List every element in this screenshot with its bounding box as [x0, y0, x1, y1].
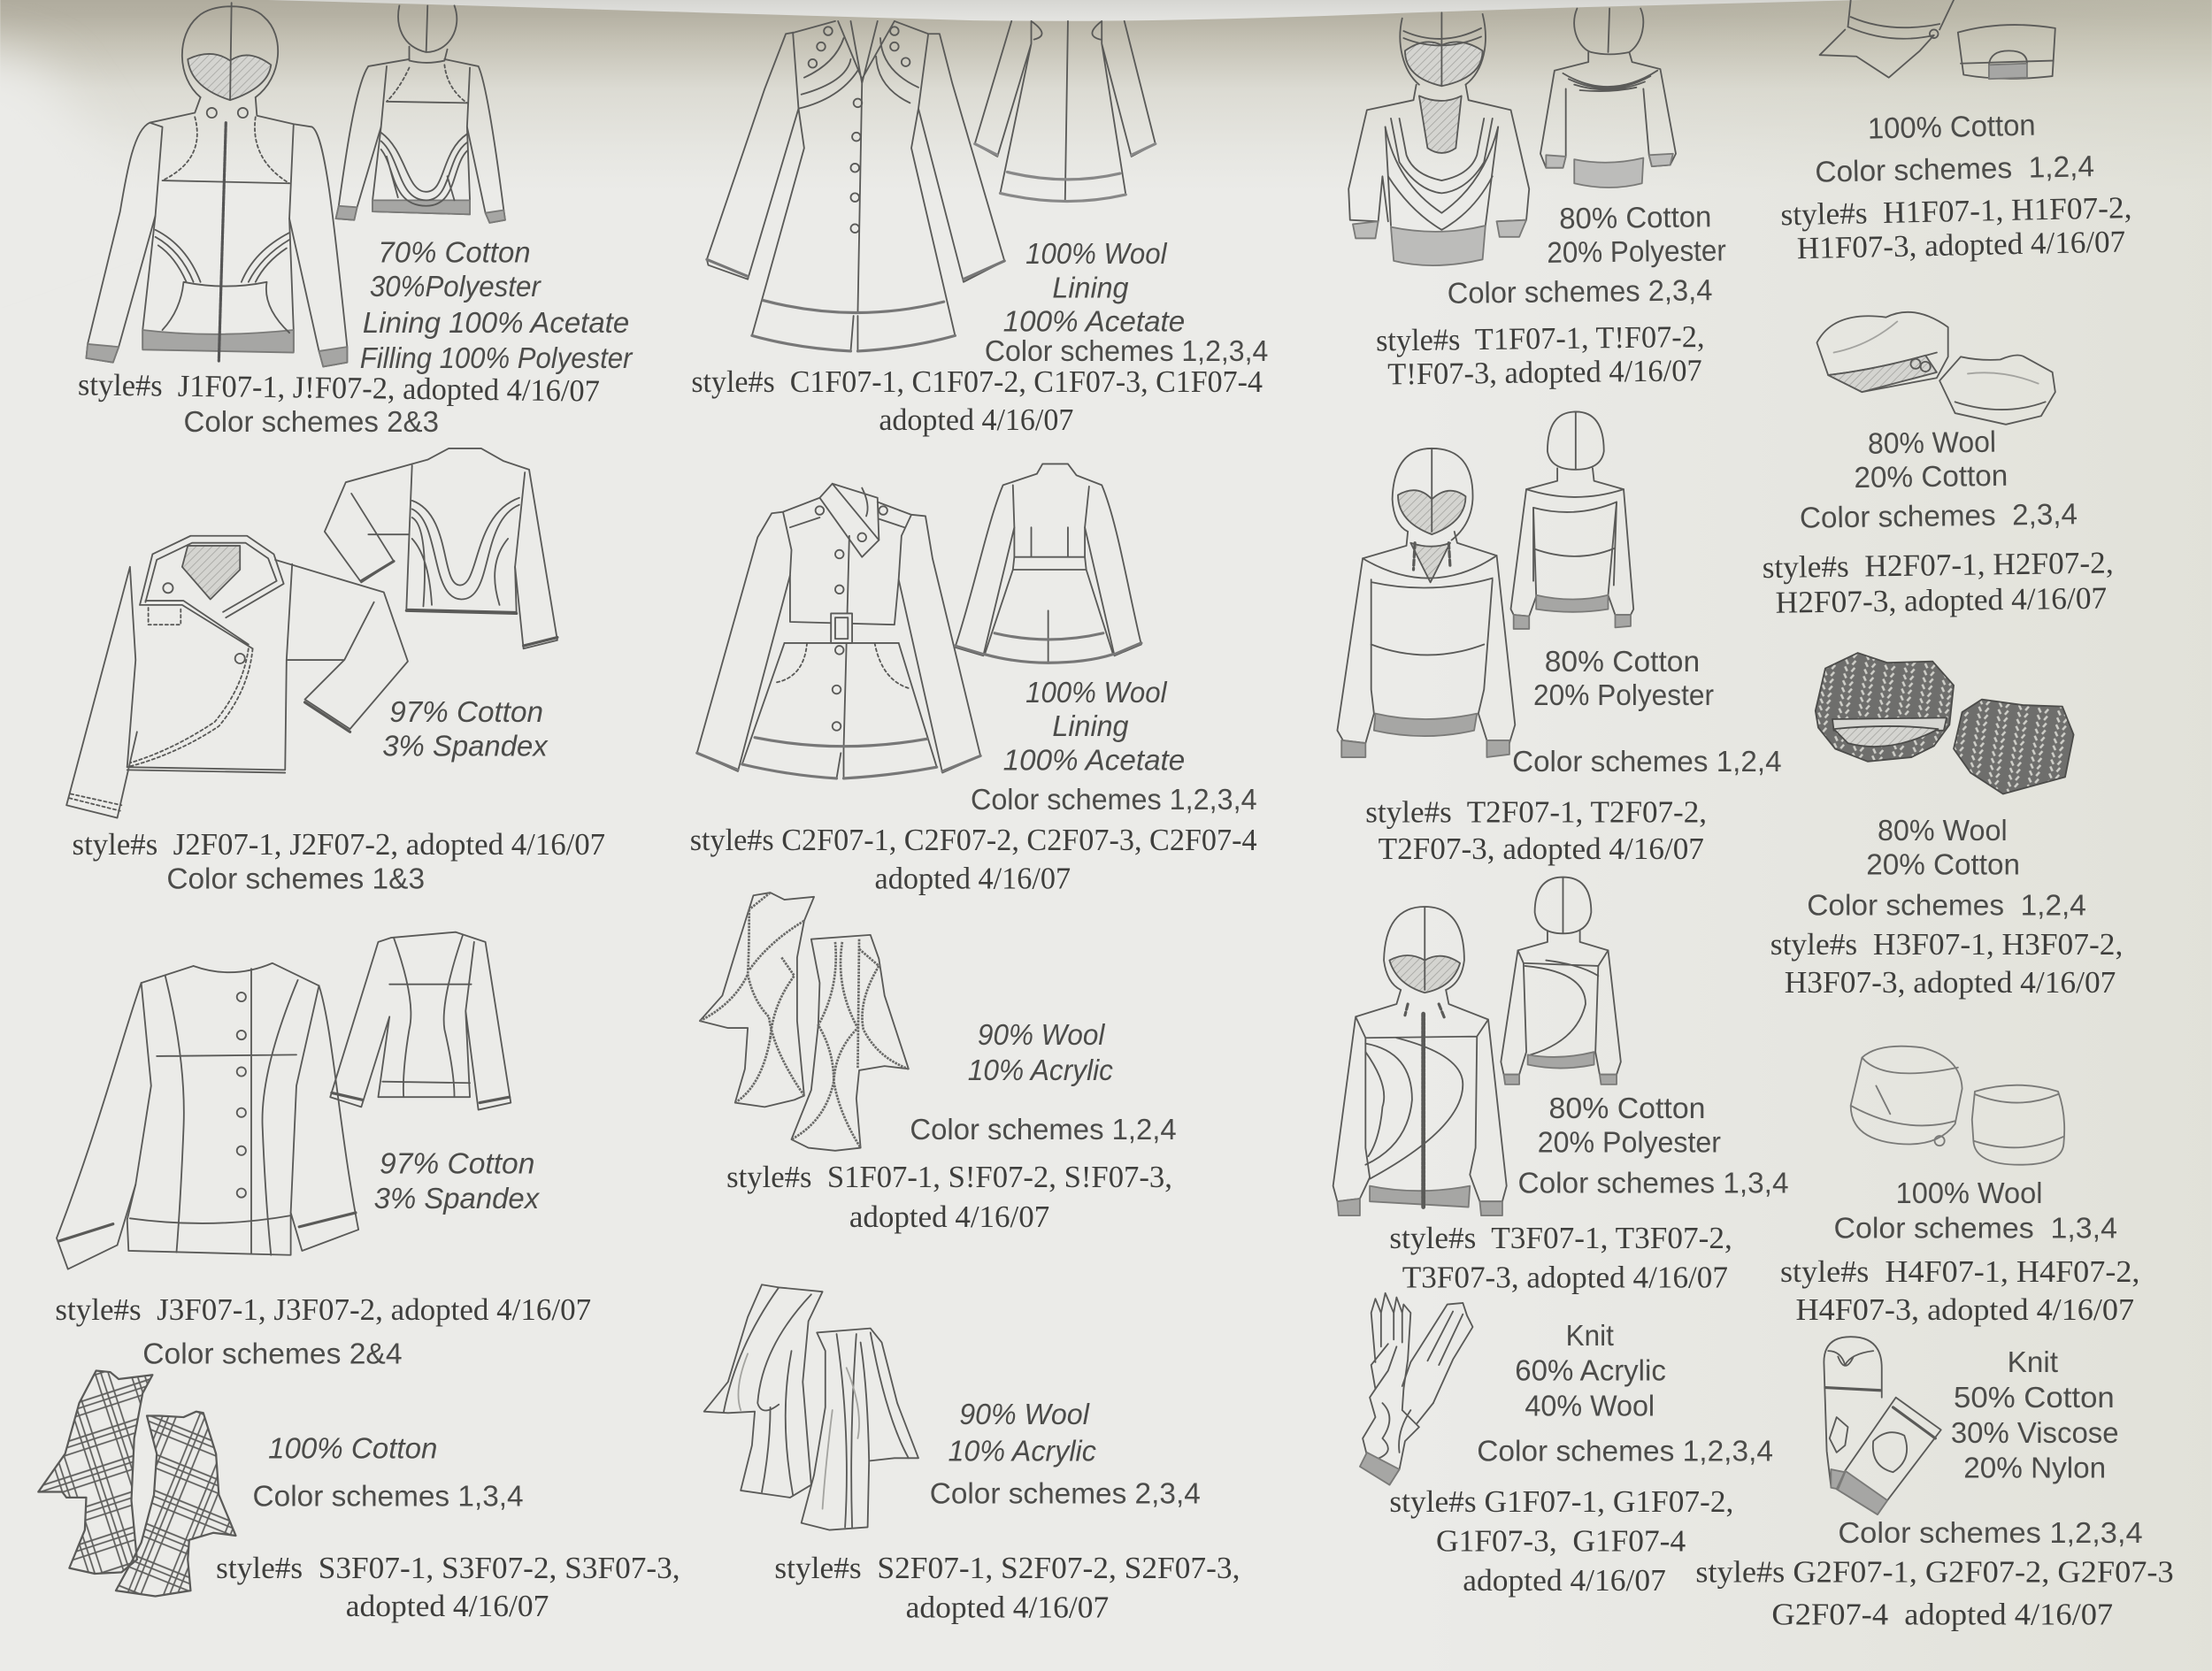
text: C2 fabric and style: 100% Wool — [1025, 677, 1168, 709]
icon: G1 ruched gloves — [1360, 1293, 1472, 1485]
text: G2 fabric and style: Color schemes 1,2,3,4 — [1838, 1517, 2143, 1550]
panel: C1 coat — [691, 21, 1268, 437]
panel: H2 caps — [1761, 312, 2114, 620]
text: S1 fabric and style — [726, 1019, 1177, 1234]
text: G1 fabric and style: Knit — [1566, 1320, 1615, 1353]
panel: J1 jacket — [78, 3, 634, 439]
icon: H2 newsboy caps — [1816, 312, 2055, 425]
text: T1 fabric and style: T!F07-3, adopted 4/16/07 — [1387, 353, 1702, 392]
icon: C2 belted coat front — [697, 484, 980, 778]
text: C2 fabric and style: 100% Acetate — [1003, 744, 1185, 777]
text: G1 fabric and style: style#s G1F07-1, G1F07-2, — [1389, 1484, 1733, 1519]
icon: C1 coat front — [707, 21, 1004, 351]
text: S1 fabric and style: Color schemes 1,2,4 — [910, 1114, 1177, 1146]
icon: T1 hoodie back — [1540, 9, 1676, 188]
text: J1 fabric and style: Filling 100% Polyester — [360, 342, 634, 375]
text: S1 fabric and style: style#s S1F07-1, S!F07-2, S!F07-3, — [726, 1160, 1172, 1194]
text: T2 fabric and style: Color schemes 1,2,4 — [1512, 746, 1782, 778]
text: T2 fabric and style: T2F07-3, adopted 4/16/07 — [1379, 832, 1704, 866]
text: S3 fabric and style: 100% Cotton — [268, 1432, 437, 1465]
panel: C2 coat — [690, 464, 1257, 895]
text: J2 fabric and style: style#s J2F07-1, J2F07-2, adopted 4/16/07 — [73, 827, 605, 862]
text: J1 fabric and style: 30%Polyester — [370, 271, 542, 303]
text: J3 fabric and style: 97% Cotton — [380, 1147, 534, 1180]
text: T3 fabric and style: 80% Cotton — [1549, 1092, 1705, 1125]
icon: G2 patterned mittens — [1824, 1337, 1941, 1514]
icon: J3 button jacket front — [57, 963, 358, 1269]
text: S3 fabric and style: Color schemes 1,3,4 — [253, 1480, 524, 1513]
text: H3 fabric and style: Color schemes 1,2,4 — [1807, 890, 2086, 923]
text: S2 fabric and style: 10% Acrylic — [948, 1435, 1096, 1468]
text: T2 fabric and style: style#s T2F07-1, T2F07-2, — [1365, 794, 1707, 829]
panel: H3 knit caps — [1770, 653, 2123, 1000]
text: T3 fabric and style — [1389, 1092, 1789, 1294]
panel: T3 hoodie — [1333, 878, 1789, 1294]
text: J1 fabric and style — [78, 237, 634, 439]
text: G1 fabric and style: 40% Wool — [1525, 1390, 1655, 1422]
text: G2 fabric and style — [1695, 1346, 2174, 1631]
text: J1 fabric and style: 70% Cotton — [378, 237, 531, 270]
text: C1 fabric and style: adopted 4/16/07 — [879, 402, 1073, 437]
text: T3 fabric and style: Color schemes 1,3,4 — [1517, 1168, 1789, 1200]
text: H3 fabric and style: 80% Wool — [1878, 815, 2008, 847]
text: H4 fabric and style: 100% Wool — [1896, 1177, 2042, 1210]
panel: G1 gloves — [1360, 1293, 1773, 1598]
panel: S2 scarf — [704, 1284, 1240, 1624]
text: G1 fabric and style: 60% Acrylic — [1515, 1355, 1666, 1388]
panel: H1 caps — [1778, 0, 2133, 266]
text: C2 fabric and style: style#s C2F07-1, C2F07-2, C2F07-3, C2F07-4 — [690, 823, 1257, 857]
text: C2 fabric and style: adopted 4/16/07 — [875, 861, 1071, 895]
text: S3 fabric and style: style#s S3F07-1, S3F07-2, S3F07-3, — [216, 1551, 680, 1585]
text: T1 fabric and style — [1374, 201, 1728, 392]
text: H3 fabric and style: 20% Cotton — [1866, 848, 2020, 881]
icon: T1 hoodie front — [1348, 12, 1529, 265]
icon: T3 hoodie back — [1501, 878, 1621, 1085]
text: C2 fabric and style: Color schemes 1,2,3,4 — [971, 784, 1257, 816]
text: J1 fabric and style: style#s J1F07-1, J!F07-2, adopted 4/16/07 — [78, 367, 600, 409]
text: S1 fabric and style: adopted 4/16/07 — [849, 1200, 1049, 1234]
text: T1 fabric and style: 20% Polyester — [1547, 234, 1726, 270]
text: S1 fabric and style: 90% Wool — [978, 1019, 1106, 1052]
text: S3 fabric and style: adopted 4/16/07 — [346, 1589, 549, 1623]
text: S2 fabric and style — [774, 1399, 1240, 1624]
text: G1 fabric and style — [1389, 1320, 1773, 1598]
icon: S1 scarf with diamond seams — [700, 893, 909, 1151]
text: T2 fabric and style: 20% Polyester — [1533, 679, 1714, 712]
text: H2 fabric and style: 80% Wool — [1868, 426, 1996, 461]
text: J1 fabric and style: Color schemes 2&3 — [183, 406, 439, 439]
text: T1 fabric and style: 80% Cotton — [1559, 201, 1712, 235]
text: J2 fabric and style: Color schemes 1&3 — [166, 862, 425, 895]
text: J3 fabric and style: Color schemes 2&4 — [142, 1338, 403, 1370]
text: H3 fabric and style — [1770, 815, 2123, 1000]
text: H4 fabric and style: Color schemes 1,3,4 — [1834, 1213, 2117, 1246]
text: J3 fabric and style: 3% Spandex — [374, 1183, 540, 1215]
text: H1 fabric and style: H1F07-3, adopted 4/16/07 — [1796, 224, 2126, 265]
icon: C2 coat back — [955, 464, 1141, 663]
text: T3 fabric and style: 20% Polyester — [1538, 1126, 1721, 1159]
text: C1 fabric and style: Lining — [1052, 272, 1129, 304]
text: T3 fabric and style: T3F07-3, adopted 4/16/07 — [1402, 1260, 1728, 1294]
icon: C1 coat back — [975, 21, 1156, 202]
text: H2 fabric and style: H2F07-3, adopted 4/16/07 — [1775, 580, 2107, 620]
panel: J3 jacket — [55, 932, 591, 1370]
text: C1 fabric and style — [691, 238, 1268, 437]
text: C2 fabric and style — [690, 677, 1257, 895]
text: H4 fabric and style: H4F07-3, adopted 4/16/07 — [1796, 1292, 2134, 1327]
text: T1 fabric and style: style#s T1F07-1, T!F07-2, — [1376, 319, 1705, 357]
text: C1 fabric and style: 100% Wool — [1025, 238, 1168, 271]
text: C1 fabric and style: style#s C1F07-1, C1F07-2, C1F07-3, C1F07-4 — [691, 364, 1263, 399]
text: J2 fabric and style: 97% Cotton — [389, 696, 543, 729]
text: T1 fabric and style: Color schemes 2,3,4 — [1448, 274, 1713, 310]
text: G1 fabric and style: Color schemes 1,2,3,4 — [1477, 1435, 1773, 1468]
text: G2 fabric and style: 50% Cotton — [1954, 1382, 2115, 1414]
icon: H3 cable knit caps — [1816, 653, 2074, 793]
panel: G2 mittens — [1695, 1337, 2174, 1631]
text: G2 fabric and style: style#s G2F07-1, G2F07-2, G2F07-3 — [1695, 1555, 2174, 1590]
icon: T2 hoodie front — [1337, 448, 1515, 757]
text: H1 fabric and style: Color schemes 1,2,4 — [1815, 150, 2094, 189]
text: S1 fabric and style: 10% Acrylic — [968, 1054, 1113, 1087]
text: J1 fabric and style: Lining 100% Acetate — [363, 307, 629, 340]
text: T3 fabric and style: style#s T3F07-1, T3F07-2, — [1389, 1221, 1732, 1255]
text: G2 fabric and style: 20% Nylon — [1963, 1453, 2106, 1485]
text: T2 fabric and style — [1365, 646, 1782, 866]
text: J2 fabric and style — [73, 696, 605, 895]
text: G2 fabric and style: G2F07-4 adopted 4/16/07 — [1771, 1597, 2113, 1631]
text: S2 fabric and style: adopted 4/16/07 — [906, 1590, 1109, 1624]
icon: J1 jacket back — [336, 5, 505, 223]
icon: J1 hooded jacket front — [86, 3, 347, 366]
icon: H1 visor cap — [1820, 0, 1954, 78]
panel: T1 hoodie — [1348, 9, 1728, 392]
text: G1 fabric and style: G1F07-3, G1F07-4 — [1436, 1524, 1686, 1559]
icon: T3 zip hoodie front — [1333, 907, 1507, 1215]
icon: J2 jacket back — [325, 448, 557, 648]
text: H1 fabric and style: style#s H1F07-1, H1F07-2, — [1780, 190, 2132, 232]
icon: T2 hoodie back — [1511, 411, 1633, 629]
panel: S1 scarf — [700, 893, 1177, 1234]
text: H1 fabric and style: 100% Cotton — [1868, 110, 2036, 146]
text: T2 fabric and style: 80% Cotton — [1545, 646, 1700, 678]
icon: J3 jacket back — [330, 932, 511, 1110]
icon: S2 draped scarf — [704, 1284, 918, 1530]
text: J3 fabric and style: style#s J3F07-1, J3F07-2, adopted 4/16/07 — [55, 1292, 591, 1327]
panel: H4 wool caps — [1780, 1046, 2139, 1327]
text: G2 fabric and style: 30% Viscose — [1951, 1417, 2119, 1450]
text: S2 fabric and style: 90% Wool — [959, 1399, 1090, 1431]
text: H4 fabric and style: style#s H4F07-1, H4F07-2, — [1780, 1254, 2139, 1289]
text: S3 fabric and style — [216, 1432, 680, 1623]
text: H4 fabric and style — [1780, 1177, 2139, 1327]
text: C2 fabric and style: Lining — [1052, 710, 1129, 743]
curled page edge at top — [268, 0, 1862, 21]
text: J2 fabric and style: 3% Spandex — [382, 730, 549, 763]
text: S2 fabric and style: Color schemes 2,3,4 — [930, 1477, 1201, 1510]
text: H3 fabric and style: H3F07-3, adopted 4/16/07 — [1785, 965, 2116, 1000]
text: C1 fabric and style: Color schemes 1,2,3,4 — [985, 335, 1268, 368]
icon: H1 cap back — [1958, 25, 2055, 79]
panel: T2 hoodie — [1337, 411, 1782, 866]
text: H2 fabric and style: 20% Cotton — [1854, 460, 2008, 494]
text: G2 fabric and style: Knit — [2008, 1346, 2059, 1379]
text: G1 fabric and style: adopted 4/16/07 — [1463, 1563, 1666, 1598]
text: H2 fabric and style: style#s H2F07-1, H2F07-2, — [1762, 546, 2114, 585]
panel: S3 scarf — [38, 1370, 680, 1623]
panel: J2 jacket — [66, 448, 605, 895]
icon: S3 plaid scarf — [38, 1370, 235, 1597]
icon: J2 asymmetrical jacket front — [66, 536, 408, 818]
text: H2 fabric and style — [1761, 425, 2114, 620]
text: H1 fabric and style — [1778, 107, 2133, 266]
text: C1 fabric and style: 100% Acetate — [1003, 306, 1185, 339]
icon: H4 pillbox caps — [1851, 1046, 2064, 1165]
text: H3 fabric and style: style#s H3F07-1, H3F07-2, — [1770, 927, 2123, 962]
text: H2 fabric and style: Color schemes 2,3,4 — [1800, 498, 2078, 535]
text: S2 fabric and style: style#s S2F07-1, S2F07-2, S2F07-3, — [774, 1551, 1240, 1585]
text: J3 fabric and style — [55, 1147, 591, 1370]
